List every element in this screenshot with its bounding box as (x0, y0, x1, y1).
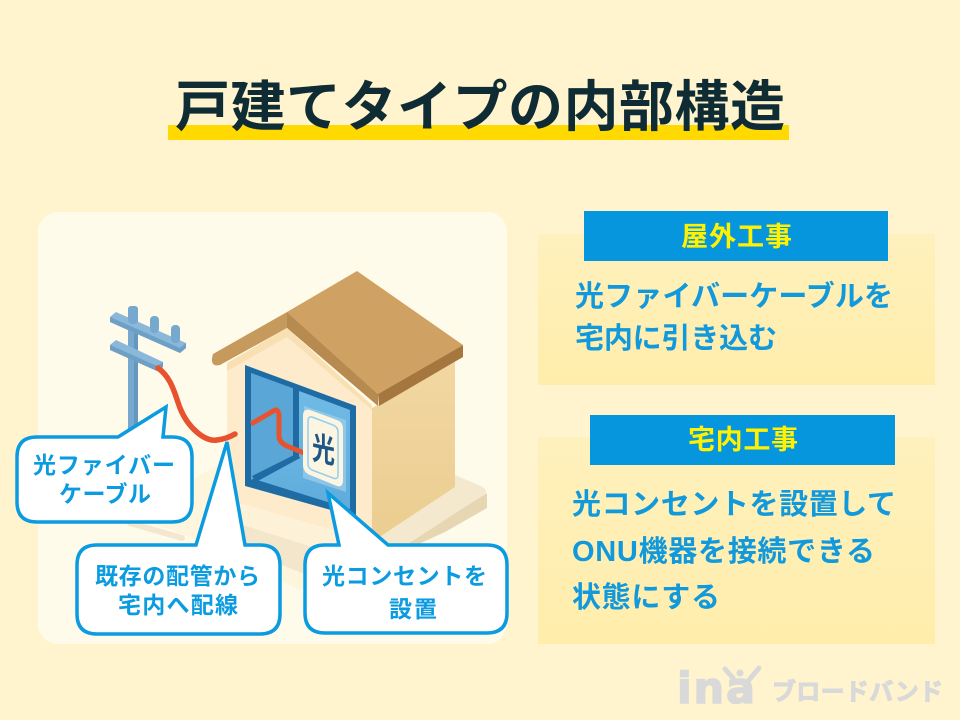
icon: house (130, 271, 487, 590)
text: indoor work description: 状態にする (572, 581, 720, 614)
cable: outside (158, 368, 235, 440)
callout: existing conduit: 宅内へ配線 (118, 592, 238, 618)
side wall (372, 362, 455, 542)
text: indoor work description (572, 488, 896, 614)
foundation front surface (227, 497, 372, 566)
callout: fiber cable: ケーブル (59, 481, 151, 507)
window (245, 365, 356, 517)
foundation left surface (130, 458, 330, 590)
callout: fiber cable: 光ファイバー (33, 452, 175, 478)
heading: outdoor work (584, 211, 888, 261)
text: indoor work description: ONU機器を接続できる (572, 535, 875, 568)
text: outdoor work description (575, 279, 893, 355)
heading: outdoor work: 屋外工事 (681, 222, 792, 252)
text: outdoor work description: 宅内に引き込む (575, 322, 777, 355)
logo: ブロードバンド (772, 678, 943, 706)
inner cable (251, 410, 304, 453)
panel: outdoor work (538, 211, 935, 385)
foundation right edge (408, 493, 487, 548)
roof (287, 271, 463, 394)
text: indoor work description: 光コンセントを設置して (572, 488, 896, 521)
callout: outlet: 光コンセントを (322, 563, 487, 589)
callout: outlet: 設置 (389, 596, 437, 622)
callout: outlet (305, 493, 507, 633)
foundation front edge (230, 512, 320, 580)
heading: indoor work (590, 415, 895, 465)
front wall (227, 330, 372, 542)
callout: fiber cable (17, 407, 192, 522)
outlet plate (303, 406, 346, 492)
title: 戸建てタイプの内部構造 (175, 76, 785, 138)
text: outdoor work description: 光ファイバーケーブルを (575, 279, 893, 313)
panel: illustration (38, 212, 507, 644)
logo (677, 664, 943, 714)
panel: indoor work (538, 415, 935, 644)
callout: existing conduit: 既存の配管から (95, 563, 260, 589)
icon: house: 光 (312, 429, 335, 470)
heading: indoor work: 宅内工事 (688, 425, 798, 455)
foundation right surface (372, 475, 486, 546)
icon: utility pole (110, 306, 186, 441)
logo: ina (677, 664, 755, 714)
callout: existing conduit (77, 442, 280, 634)
ground shadow (130, 523, 182, 538)
